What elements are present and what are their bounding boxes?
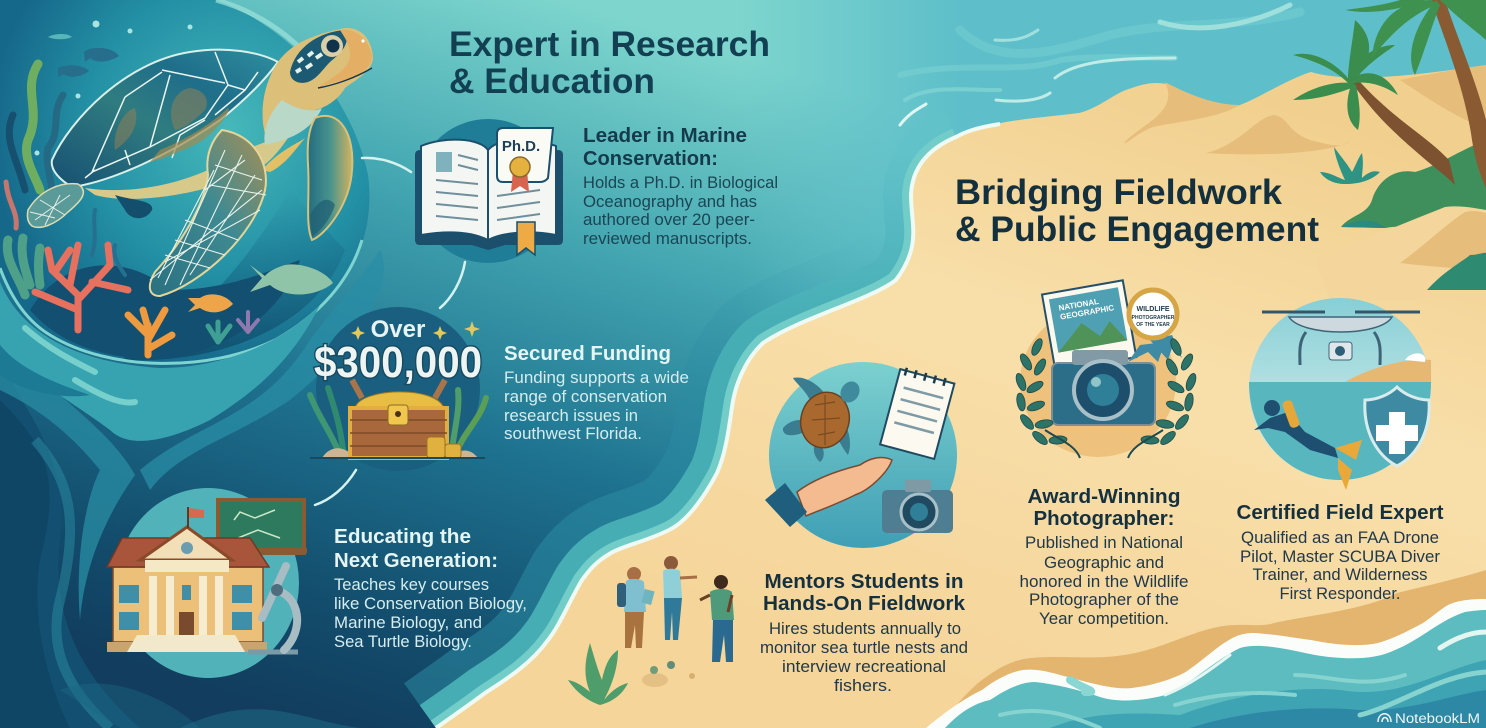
NotebookLM logo: NotebookLM <box>1395 711 1480 726</box>
text: leader in marine conservation: Holds a Ph.D. in Biological <box>583 174 778 192</box>
heading: Expert in Research & Education: Expert in Research <box>449 25 770 64</box>
icon: drone, diver and shield <box>1249 298 1431 490</box>
text: mentors students: monitor sea turtle nests and <box>760 639 968 657</box>
text: mentors students: interview recreational <box>782 658 946 676</box>
text: certified field expert: Certified Field Expert <box>1236 501 1444 524</box>
text: certified field expert: First Responder. <box>1280 585 1400 603</box>
text: mentors students: Hands-On Fieldwork <box>763 592 966 615</box>
icon: treasure chest with $300,000 <box>310 307 486 471</box>
text: secured funding: southwest Florida. <box>504 425 642 443</box>
shoreline foam <box>436 124 1000 728</box>
panel: educating the next generation <box>107 488 527 678</box>
connector curves <box>315 158 465 505</box>
heading: Bridging Fieldwork & Public Engagement: Bridging Fieldwork <box>955 173 1283 212</box>
icon: three students in the field <box>568 556 734 705</box>
text: certified field expert: Trainer, and Wilderness <box>1252 566 1428 584</box>
panel: secured funding <box>310 307 689 471</box>
water bottom right with waves <box>926 570 1486 728</box>
icon: treasure chest with $300,000: $300,000 <box>314 338 482 387</box>
water ripples top right <box>900 5 1300 125</box>
icon: camera, photo, rosette and laurel wreath: GEOGRAPHIC <box>1059 303 1115 322</box>
icon: treasure chest with $300,000: Over <box>371 316 425 343</box>
text: educating the next generation: Marine Biology, and <box>334 614 482 632</box>
icon: camera, photo, rosette and laurel wreath: PHOTOGRAPHER <box>1132 315 1175 321</box>
text: certified field expert: Qualified as an FAA Drone <box>1241 529 1439 547</box>
icon: book with Ph.D. certificate <box>415 119 563 263</box>
icon: camera, photo, rosette and laurel wreath <box>1014 280 1198 458</box>
text: mentors students: Hires students annually to <box>769 620 961 638</box>
text: leader in marine conservation: authored over 20 peer- <box>583 211 755 229</box>
icon: camera, photo, rosette and laurel wreath: NATIONAL <box>1058 297 1100 313</box>
text: educating the next generation: like Conservation Biology, <box>334 595 527 613</box>
seaweed <box>6 64 125 295</box>
text: award-winning photographer: honored in the Wildlife <box>1020 573 1188 591</box>
icon: camera, photo, rosette and laurel wreath: WILDLIFE <box>1136 306 1170 313</box>
text: mentors students: Mentors Students in <box>764 570 964 593</box>
water blob under orb <box>0 282 320 441</box>
text: educating the next generation <box>334 525 527 651</box>
text: award-winning photographer: Photographer of the <box>1029 591 1179 609</box>
heading: Expert in Research & Education: & Education <box>449 62 655 101</box>
text: mentors students <box>760 570 968 695</box>
heading: Bridging Fieldwork & Public Engagement: & Public Engagement <box>955 210 1319 249</box>
turtle scene orb <box>0 0 373 441</box>
text: award-winning photographer: Published in National <box>1025 534 1183 552</box>
text: award-winning photographer: Award-Winning <box>1028 485 1180 508</box>
text: educating the next generation: Educating the <box>334 525 471 548</box>
text: award-winning photographer <box>1020 485 1188 628</box>
text: leader in marine conservation <box>583 124 778 248</box>
icon: camera, photo, rosette and laurel wreath: OF THE YEAR <box>1136 322 1170 328</box>
heading: Expert in Research & Education <box>449 25 770 101</box>
text: award-winning photographer: Photographer: <box>1034 507 1174 530</box>
panel: mentors students <box>568 362 968 705</box>
sand dunes shading <box>1124 65 1486 154</box>
panel: certified field expert <box>1236 298 1444 603</box>
text: secured funding: range of conservation <box>504 388 667 406</box>
coral <box>35 245 258 355</box>
text: certified field expert: Pilot, Master SCUBA Diver <box>1240 548 1441 566</box>
text: mentors students: fishers. <box>834 677 892 695</box>
text: leader in marine conservation: Conservation: <box>583 147 718 170</box>
text: secured funding <box>504 342 689 443</box>
shallow water band along the shore <box>436 137 956 728</box>
icon: book with Ph.D. certificate: Ph.D. <box>502 138 540 155</box>
panel: award-winning photographer <box>1014 280 1198 628</box>
text: leader in marine conservation: Oceanography and has <box>583 193 757 211</box>
text: award-winning photographer: Year competition. <box>1039 610 1169 628</box>
text: award-winning photographer: Geographic and <box>1044 554 1164 572</box>
icon: university building with chalkboard and microscope <box>107 488 307 678</box>
text: educating the next generation: Teaches key courses <box>334 576 489 594</box>
text: leader in marine conservation: Leader in Marine <box>583 124 747 147</box>
text: educating the next generation: Next Generation: <box>334 549 498 572</box>
icon: turtle, notepad, hand and camera <box>765 362 957 548</box>
text: secured funding: research issues in <box>504 407 638 425</box>
turtle flippers <box>150 130 266 296</box>
text: certified field expert <box>1236 501 1444 603</box>
icon: palm trees and bushes <box>1293 0 1486 300</box>
panel: leader in marine conservation <box>415 119 778 263</box>
turtle neck and head <box>263 28 373 142</box>
text: leader in marine conservation: reviewed manuscripts. <box>583 230 752 248</box>
currents and swirls, left <box>0 250 384 728</box>
fish <box>250 264 333 295</box>
turtle body <box>85 135 290 199</box>
text: educating the next generation: Sea Turtle Biology. <box>334 633 472 651</box>
text: secured funding: Secured Funding <box>504 342 671 365</box>
turtle shell <box>52 50 278 187</box>
heading: Bridging Fieldwork & Public Engagement <box>955 173 1319 249</box>
text: secured funding: Funding supports a wide <box>504 369 689 387</box>
sand beach <box>436 65 1486 728</box>
top right water <box>740 0 1486 400</box>
